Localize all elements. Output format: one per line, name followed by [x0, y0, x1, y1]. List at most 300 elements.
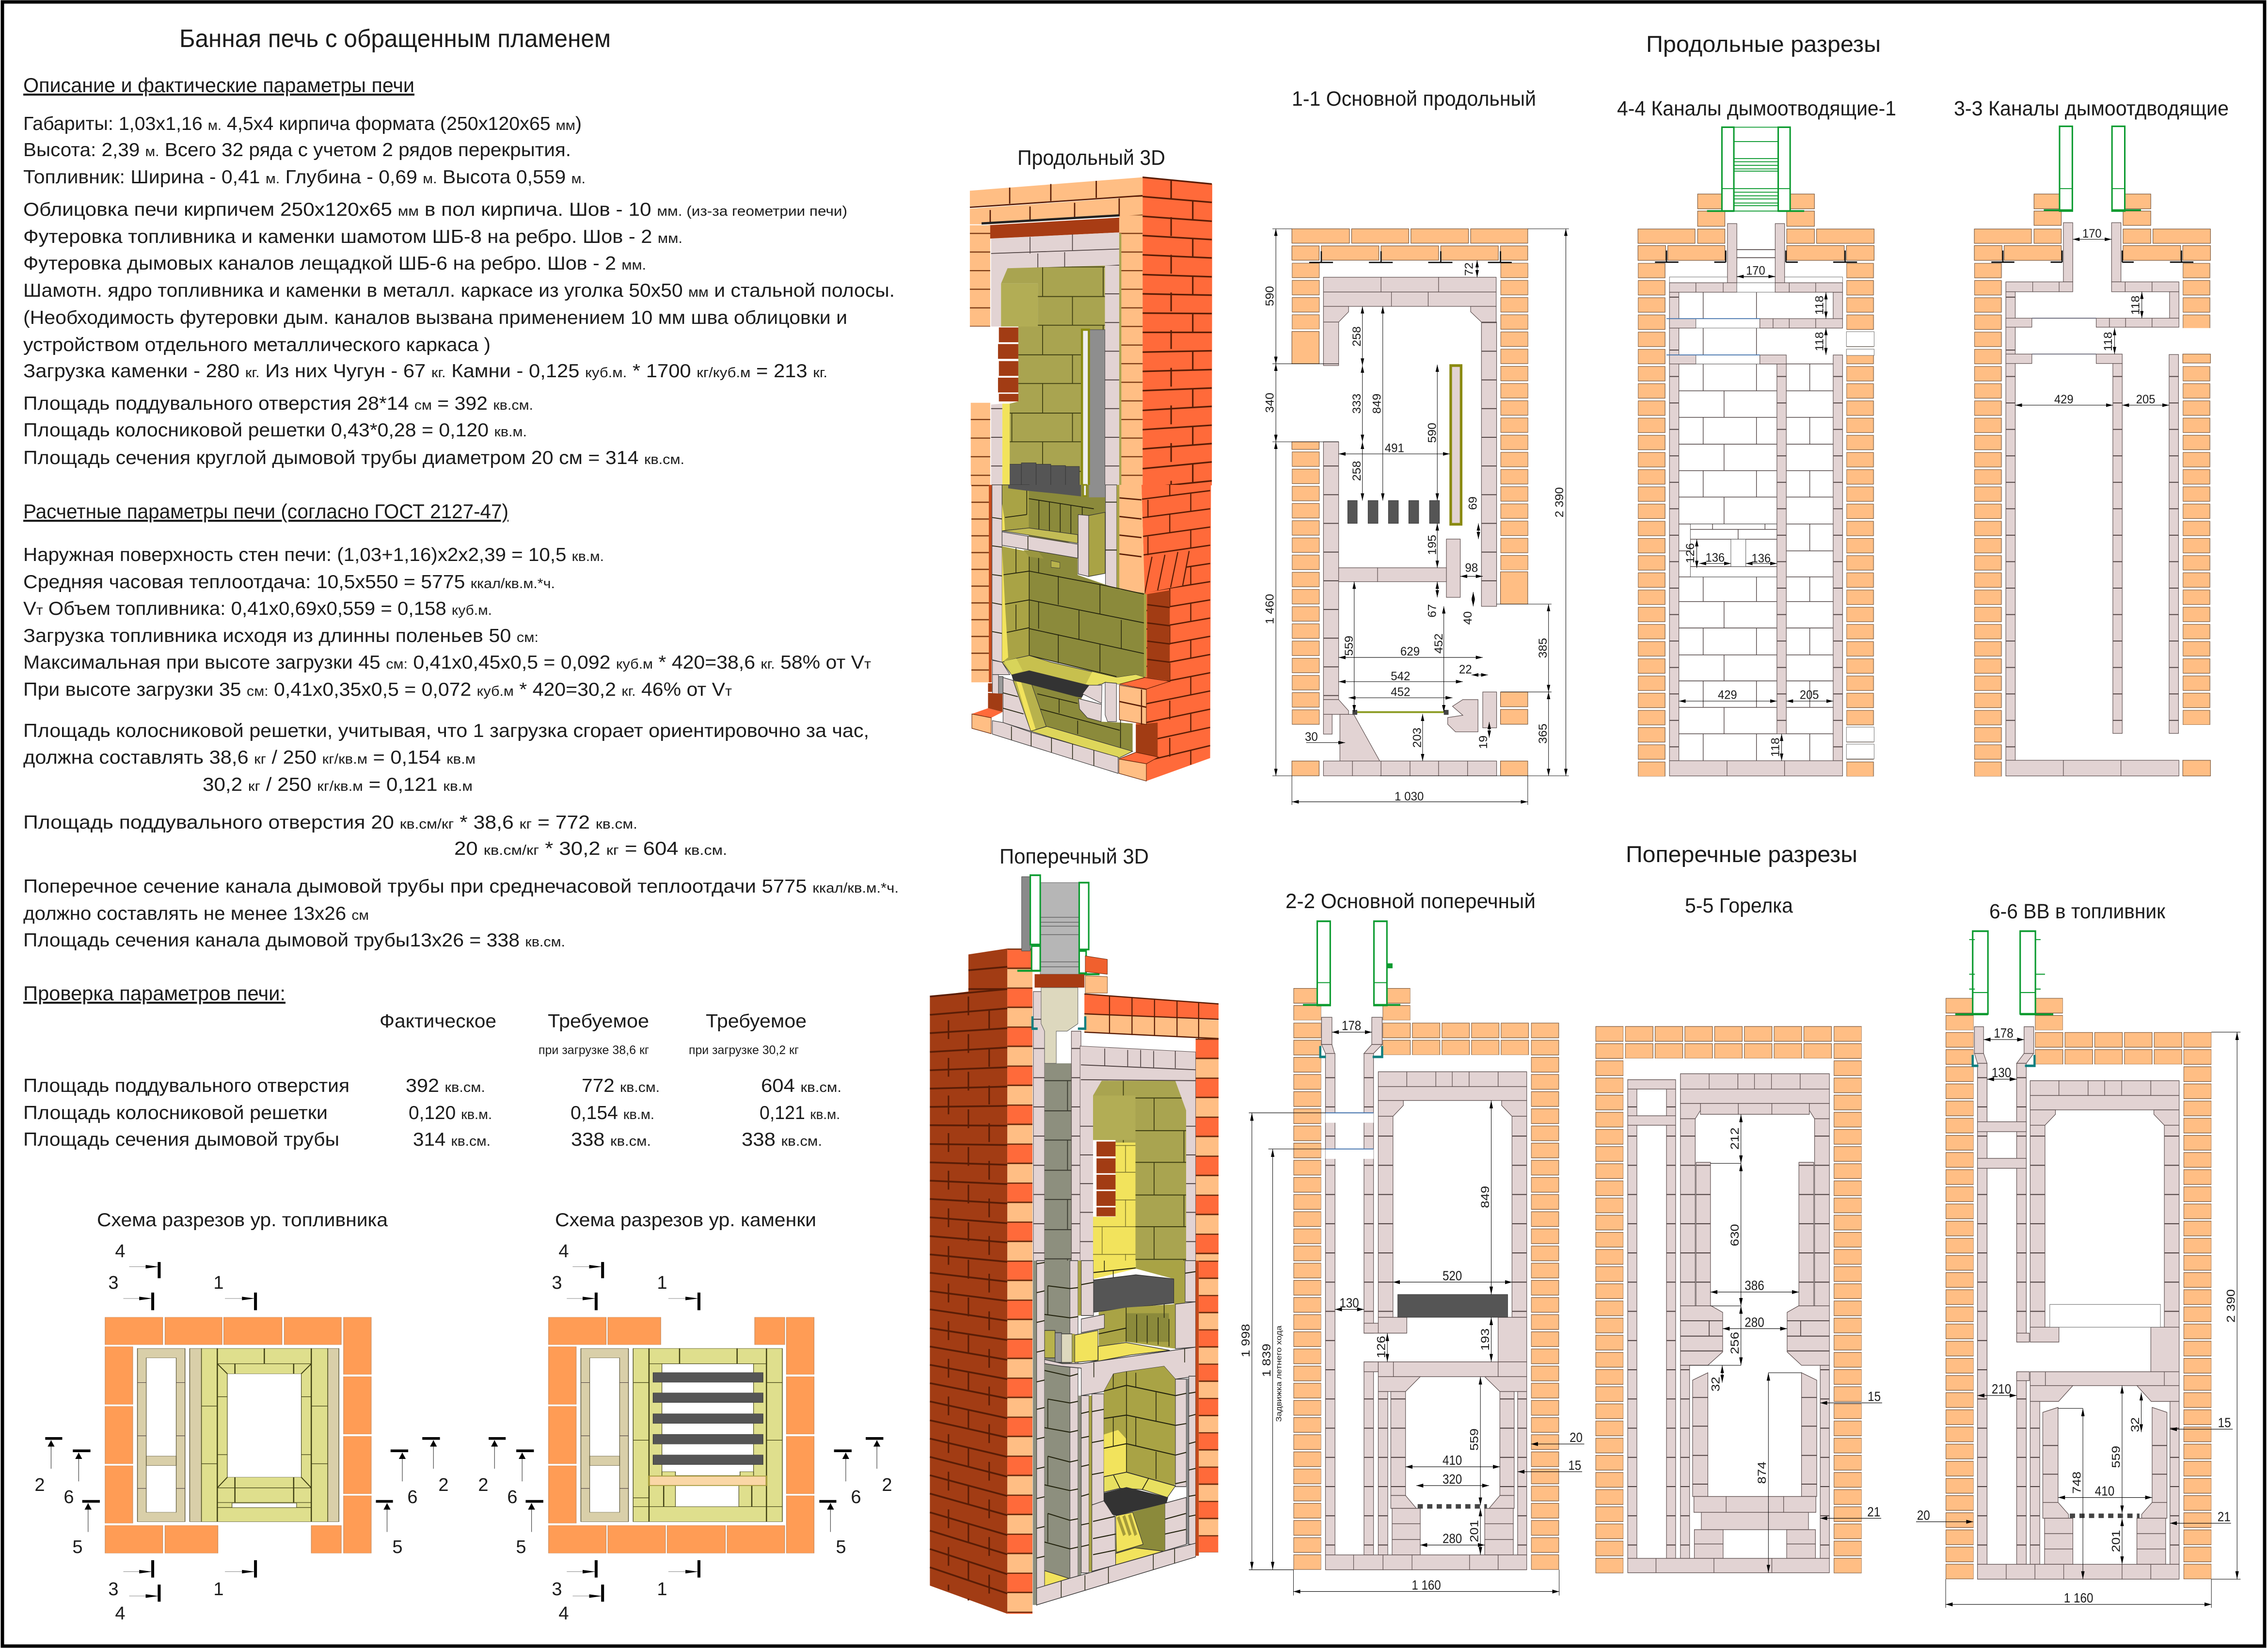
plan section labels: [34, 1241, 892, 1624]
dimensions: 559: [2109, 1446, 2123, 1468]
dimensions: 320: [1443, 1472, 1462, 1487]
steel angles: [1655, 251, 1857, 262]
firebox volume: Vт Объем топливника: 0,41x0,69x0,559 = 0,158 куб.м.: [23, 598, 492, 619]
lower chamber firebrick: [1326, 1362, 1527, 1570]
3D hearth: [1104, 1473, 1175, 1497]
firebrick structure: [1323, 277, 1497, 776]
dimensions: 170: [1746, 264, 1765, 278]
dimensions: 849: [1371, 394, 1383, 414]
3D right olive strip: [1117, 485, 1119, 589]
dimensions: 22: [1459, 663, 1472, 676]
dimensions: [1679, 264, 1833, 761]
outer facing bricks: [1292, 229, 1528, 776]
3D floor yellow: [1031, 726, 1133, 758]
dimensions: 15: [2218, 1415, 2231, 1430]
cast iron blocks: [1348, 500, 1440, 523]
dimensions: 118: [1813, 332, 1826, 351]
heading: transverse 3D: Поперечный 3D: [999, 845, 1149, 868]
lower chamber firebrick: [1978, 1372, 2179, 1579]
dimensions: 491: [1385, 442, 1404, 455]
dimensions line: Габариты: 1,03x1,16 м. 4,5x4 кирпича формата (250x120x65 мм): [23, 113, 582, 134]
grate area: Площадь колосниковой решетки 0,43*0,28 = 0,120 кв.м.: [23, 420, 527, 441]
upper chamber firebrick: [2017, 1081, 2179, 1372]
green chimney collar: [2044, 127, 2141, 211]
3D interior yellow: [1104, 1430, 1126, 1477]
section 3-3 drawing: [1974, 127, 2210, 776]
3D upper floor: [1002, 528, 1078, 544]
3D lower yellow strip: [1002, 548, 1008, 662]
dimensions: 130: [1992, 1065, 2011, 1080]
plan outer bricks: [549, 1317, 814, 1553]
flue calc 3: Площадь сечения канала дымовой трубы13x26 = 338 кв.см.: [23, 930, 565, 951]
3D cast iron: [1008, 485, 1081, 496]
dimensions: 32: [1709, 1377, 1722, 1392]
3D pink pier: [1175, 1302, 1196, 1349]
row 2 label: Площадь колосниковой решетки: [23, 1103, 328, 1123]
back wall bricks: [1669, 277, 1842, 761]
grate: [1352, 710, 1448, 715]
dimensions: 258: [1351, 326, 1364, 347]
plan firebox lining: [190, 1348, 339, 1521]
drawing: longitudinal 3D cutaway, lower part: [971, 485, 1211, 781]
plan section labels: 6: [507, 1487, 518, 1507]
firebox line: Топливник: Ширина - 0,41 м. Глубина - 0,69 м. Высота 0,559 м.: [23, 167, 586, 188]
plan stove chamber lining: [633, 1348, 782, 1521]
3D flue gray wall: [1045, 1063, 1071, 1459]
dimensions: 410: [1443, 1454, 1462, 1468]
title: Банная печь с обращенным пламенем: [179, 25, 611, 53]
dimensions: 195: [1426, 535, 1439, 555]
3D pink slab and arch frame: [1045, 1347, 1196, 1395]
dimensions: 520: [1443, 1269, 1462, 1283]
3D olive riser: [1089, 512, 1105, 576]
3D steel plate: [1082, 330, 1105, 498]
dimensions: 15: [1568, 1458, 1581, 1473]
3D teal angles: [1032, 1016, 1085, 1029]
section 5-5 drawing: [1596, 1026, 1882, 1573]
dimensions: 429: [1718, 688, 1737, 702]
dimensions: 1 160: [1412, 1578, 1441, 1593]
dimensions: 205: [1800, 688, 1819, 702]
dimensions: 30: [1305, 731, 1318, 744]
frame line: Шамотн. ядро топливника и каменки в металл. каркасе из уголка 50x50 мм и стальной полосы.: [23, 280, 895, 301]
steel partition: [1451, 366, 1461, 524]
lining line 1: Футеровка топливника и каменки шамотом ШБ-8 на ребро. Шов - 2 мм.: [23, 226, 682, 247]
dimensions: 1 160: [2064, 1590, 2093, 1605]
row 3 required b: 338 кв.см.: [742, 1129, 822, 1150]
dimensions: [1240, 1019, 1584, 1596]
dimensions: 126: [1375, 1336, 1388, 1358]
column header actual: Фактическое: [380, 1011, 496, 1032]
dimensions: 67: [1426, 604, 1439, 618]
row 2 actual: 0,120 кв.м.: [409, 1103, 492, 1123]
3D yellow left strip: [1002, 404, 1010, 525]
plan section labels: 5: [836, 1537, 846, 1557]
outer facing bricks: [1946, 998, 2211, 1579]
dimensions: 72: [1463, 262, 1475, 276]
row 1 required a: 772 кв.см.: [582, 1075, 660, 1096]
dimensions: 629: [1400, 645, 1420, 658]
3D lower side wall: [1002, 546, 1029, 662]
heading: section 4-4: 4-4 Каналы дымоотводящие-1: [1617, 97, 1896, 120]
dimensions: 20: [1570, 1431, 1583, 1445]
lining line 2: Футеровка дымовых каналов лещадкой ШБ-6 на ребро. Шов - 2 мм.: [23, 253, 646, 274]
chimney area: Площадь сечения круглой дымовой трубы диаметром 20 см = 314 кв.см.: [23, 448, 684, 468]
3D firebox interior: [1093, 1081, 1186, 1318]
heading: stove level plan: Схема разрезов ур. каменки: [555, 1210, 816, 1231]
text block: description and actual parameters: [23, 74, 895, 468]
3D ash pit yellow: [1116, 1512, 1163, 1565]
grate: [2070, 1514, 2140, 1518]
steel angles: [1991, 251, 2193, 262]
3D firebox left pink: [1081, 1261, 1094, 1315]
3D lower left wall: [1092, 1394, 1104, 1506]
plan section labels: 5: [72, 1537, 83, 1557]
3D ash chute: [1013, 680, 1046, 731]
firebrick walls: [1666, 224, 1842, 776]
heading: section 6-6: 6-6 ВВ в топливник: [1989, 900, 2166, 923]
3D right end column: [1199, 1261, 1218, 1553]
plan section labels: 1: [213, 1273, 224, 1293]
dimensions: 452: [1432, 633, 1445, 654]
note line 2: устройством отдельного металлического каркаса ): [23, 335, 491, 355]
3D cast iron box: [1094, 1275, 1174, 1312]
dimensions: 590: [1264, 286, 1277, 306]
3D olive interior upper: [1001, 266, 1105, 485]
dimensions: 32: [2128, 1417, 2142, 1432]
3D red side face: [1142, 176, 1212, 485]
dimensions: 69: [1467, 496, 1479, 510]
section 6-6 drawing: [1916, 931, 2240, 1608]
plan section labels: 3: [108, 1579, 119, 1600]
steel T profiles: [1309, 251, 1512, 262]
stove load line: Загрузка каменки - 280 кг. Из них Чугун - 67 кг. Камни - 0,125 куб.м. * 1700 кг/куб.м = 213 кг.: [23, 361, 827, 382]
max load: Максимальная при высоте загрузки 45 см: 0,41x0,45x0,5 = 0,092 куб.м * 420=38,6 кг. 58% от V т: [23, 652, 871, 673]
plan section labels: 2: [438, 1475, 449, 1495]
plan section labels: 4: [558, 1241, 569, 1262]
3D pink steps: [1078, 685, 1102, 721]
3D flue side block: [1045, 1330, 1075, 1362]
dimensions: 2 390: [2224, 1289, 2237, 1323]
3D red side face: [1136, 485, 1211, 781]
ash calc 2: 20 кв.см/кг * 30,2 кг = 604 кв.см.: [454, 838, 727, 859]
dimensions: 40: [1461, 611, 1475, 624]
plan section labels: 6: [63, 1487, 74, 1507]
note line 1: (Необходимость футеровки дым. каналов вызвана применением 10 мм шва облицовки и: [23, 307, 847, 328]
3D left pink wall: [992, 485, 1002, 662]
dimensions: 21: [1867, 1504, 1880, 1520]
dimensions: 429: [2054, 393, 2074, 406]
plan section marks: [489, 1262, 883, 1601]
3D pink lower right: [1165, 1497, 1186, 1551]
plan section labels: 6: [851, 1487, 861, 1507]
outer surface: Наружная поверхность стен печи: (1,03+1,16)x2x2,39 = 10,5 кв.м.: [23, 544, 604, 565]
dimensions: 333: [1351, 394, 1364, 414]
3D right step bricks: [1085, 956, 1107, 993]
3D right pink wall upper: [1185, 1261, 1196, 1302]
grate calc 1: Площадь колосниковой решетки, учитывая, что 1 загрузка сгорает ориентировочно за час,: [23, 720, 869, 741]
3D upper yellow wall: [1094, 1261, 1136, 1279]
dimensions: 118: [2129, 296, 2142, 315]
dimensions: 118: [1769, 737, 1782, 757]
3D floor yellow at flue: [1045, 1570, 1070, 1586]
dimensions: 590: [1426, 423, 1439, 443]
heat output: Средняя часовая теплоотдача: 10,5x550 = 5775 ккал/кв.м.*ч.: [23, 572, 555, 592]
3D opening bricks: [998, 327, 1020, 401]
dimensions: 340: [1264, 393, 1277, 413]
3D right olive strip lower: [1144, 594, 1146, 676]
dimensions: 205: [2136, 393, 2155, 406]
3D floor pink row: [1037, 1543, 1196, 1605]
dimensions: 258: [1351, 461, 1364, 481]
3D ash pit rear: [1031, 684, 1133, 752]
plan section labels: 4: [115, 1241, 126, 1262]
flue calc 1: Поперечное сечение канала дымовой трубы при среднечасовой теплоотдачи 5775 ккал/кв.м.*ч.: [23, 876, 899, 897]
3D pink lower left: [1092, 1501, 1116, 1571]
dimensions: [2015, 227, 2169, 406]
plan cast iron bars: [653, 1373, 763, 1465]
3D firebox light bricks: [1119, 685, 1146, 724]
3D yellow block: [1075, 1330, 1098, 1362]
3D middle floor: [1082, 1343, 1170, 1364]
3D cast iron blocks: [1008, 463, 1079, 496]
dimensions: 178: [1994, 1025, 2014, 1041]
dimensions: 542: [1391, 670, 1410, 683]
plan section labels: 3: [552, 1273, 562, 1293]
section 4-4 drawing: [1638, 127, 1874, 776]
3D arch bricks: [1142, 550, 1189, 593]
dimensions: 170: [2082, 227, 2102, 240]
plan section labels: 1: [657, 1579, 667, 1600]
3D right walls: [1175, 1376, 1196, 1544]
grate: [1418, 1504, 1487, 1508]
3D pink hearth corner: [992, 660, 1010, 695]
3D upper yellow: [1002, 504, 1005, 531]
3D flue pink right: [1071, 1031, 1081, 1427]
outer facing bricks: [1974, 194, 2210, 776]
table: parameter check: [23, 982, 841, 1150]
grate calc 3: 30,2 кг / 250 кг/кв.м = 0,121 кв.м: [203, 774, 473, 795]
dimensions: 280: [1745, 1314, 1764, 1330]
cladding line: Облицовка печи кирпичем 250x120x65 мм в пол кирпича. Шов - 10 мм. (из-за геометрии печи): [23, 199, 847, 220]
3D lower rear wall: [1029, 548, 1145, 677]
column header required 1: Требуемое: [548, 1011, 649, 1032]
dimensions: 280: [1443, 1532, 1462, 1546]
3D firebrick frame: [991, 232, 1119, 485]
dimensions: 410: [2095, 1483, 2114, 1499]
dimensions: Задвижка летнего хода: [1274, 1326, 1283, 1422]
plan flue channel: [138, 1348, 185, 1521]
3D opening bricks: [1096, 1141, 1115, 1217]
row 3 required a: 338 кв.см.: [571, 1129, 651, 1150]
3D chute yellow: [1016, 681, 1036, 731]
3D left facing bricks: [971, 485, 989, 682]
3D interior block: [1093, 1095, 1136, 1140]
3D chimney pipe: [1017, 875, 1099, 974]
plan section labels: 5: [392, 1537, 403, 1557]
dimensions: 98: [1465, 561, 1478, 575]
3D right end column: [1196, 1039, 1219, 1435]
heading: section 5-5: 5-5 Горелка: [1685, 894, 1793, 917]
3D dark red edge: [1196, 1261, 1199, 1556]
dimensions: 256: [1728, 1332, 1742, 1354]
dimensions: 118: [1813, 296, 1826, 315]
column header required 2: Требуемое: [706, 1011, 807, 1032]
dimensions: 136: [1706, 551, 1725, 565]
3D pink riser: [1078, 514, 1089, 576]
dimensions: 874: [1755, 1461, 1769, 1484]
dimensions: [1690, 1114, 1882, 1573]
row 3 actual: 314 кв.см.: [413, 1129, 491, 1150]
3D upper rear bricks: [1005, 485, 1105, 543]
3D steel plate and gray block: [1083, 485, 1105, 497]
3D interior: [1104, 1366, 1175, 1496]
lower firebrick: [1628, 1365, 1829, 1573]
plan flue channel: [581, 1348, 629, 1521]
dimensions: 386: [1745, 1278, 1764, 1293]
plan section labels: 2: [478, 1475, 489, 1495]
flue walls: [1973, 1027, 2034, 1564]
3D arch pieces: [1024, 550, 1060, 568]
dimensions: [1264, 229, 1569, 805]
dimensions: 212: [1728, 1127, 1742, 1150]
3D olive strip: [1078, 1261, 1081, 1315]
dimensions: 1 460: [1264, 594, 1277, 624]
3D right pink wall: [1106, 485, 1117, 591]
3D right top rows: [1084, 994, 1219, 1039]
plan section labels: 2: [34, 1475, 45, 1495]
dimensions: 2 390: [1553, 487, 1566, 517]
ash opening area: Площадь поддувального отверстия 28*14 см = 392 кв.см.: [23, 393, 533, 414]
3D upper left bricks: [970, 225, 990, 327]
3D grate: [1104, 1487, 1168, 1516]
3D hearth: [1002, 656, 1145, 686]
row 2 required a: 0,154 кв.м.: [571, 1103, 654, 1123]
plan: firebox level: [45, 1262, 440, 1601]
3D floor pink row: [992, 720, 1118, 773]
plan section labels: 4: [115, 1603, 126, 1624]
plan section labels: 1: [657, 1273, 667, 1293]
dimensions: 452: [1391, 686, 1410, 699]
3D flue pink right: [1070, 1261, 1078, 1579]
3D interior block: [1001, 284, 1038, 327]
drawing: transverse 3D cutaway, upper part: [930, 875, 1219, 1614]
dimensions: 849: [1479, 1186, 1492, 1208]
3D pink slab: [1002, 532, 1078, 558]
3D light end bricks: [1119, 196, 1143, 485]
3D frame joints: [1080, 1048, 1196, 1242]
3D chimney base: [1034, 974, 1084, 988]
dimensions: 385: [1537, 638, 1550, 658]
flue walls: [1320, 1017, 1382, 1555]
row 3 label: Площадь сечения дымовой трубы: [23, 1129, 339, 1150]
dimensions: 15: [1868, 1389, 1881, 1404]
dimensions: 630: [1728, 1224, 1742, 1246]
green chimney collar: [1955, 931, 2053, 1014]
3D left red edge: [989, 485, 992, 682]
3D left pink wall: [991, 404, 1002, 525]
plan section labels: 3: [552, 1579, 562, 1600]
upper chamber firebrick: [1364, 1072, 1527, 1362]
heading: section 3-3: 3-3 Каналы дымоотдводящие: [1954, 97, 2229, 120]
heading: firebox level plan: Схема разрезов ур. топливника: [97, 1210, 388, 1231]
sub header 2: при загрузке 30,2 кг: [689, 1043, 799, 1057]
dimensions: [1916, 1025, 2240, 1608]
3D front strip bricks: [1007, 948, 1032, 1614]
3D dark recessed bricks: [1147, 590, 1170, 681]
heading: longitudinal sections: Продольные разрезы: [1646, 31, 1881, 57]
3D lower left columns: [1078, 1395, 1092, 1578]
dimensions: 136: [1752, 552, 1771, 565]
3D bottom right brick: [1119, 752, 1158, 781]
flue calc 2: должно составлять не менее 13x26 см: [23, 903, 369, 924]
dimensions: 201: [2109, 1530, 2123, 1552]
dimensions: 19: [1477, 736, 1490, 749]
3D left pink strip: [1033, 992, 1045, 1437]
plan section labels: 2: [882, 1475, 892, 1495]
3D flue cream section: [1041, 988, 1078, 1063]
row 1 label: Площадь поддувального отверстия: [23, 1075, 349, 1096]
plan section labels: 1: [213, 1579, 224, 1600]
3D flue gray wall: [1045, 1261, 1070, 1579]
ash calc 1: Площадь поддувального отверстия 20 кв.см/кг * 38,6 кг = 772 кв.см.: [23, 812, 637, 833]
dimensions: 20: [1917, 1507, 1930, 1523]
row 2 required b: 0,121 кв.м.: [760, 1103, 840, 1123]
row 1 required b: 604 кв.см.: [761, 1075, 841, 1096]
dimensions: 178: [1342, 1019, 1361, 1033]
3D firebox mouth top: [1119, 677, 1170, 689]
3D left pink strip: [1037, 1261, 1045, 1605]
3D dark lower bricks: [1136, 722, 1158, 757]
section 2-2 drawing: [1240, 921, 1584, 1596]
3D upper side wall: [1002, 485, 1029, 531]
3D thick yellow band: [1119, 233, 1121, 525]
outer facing bricks: [1596, 1026, 1862, 1573]
drawing: transverse 3D cutaway, lower part: [1033, 1261, 1218, 1605]
dimensions: 559: [1343, 636, 1356, 656]
heading: calculated: Расчетные параметры печи (согласно ГОСТ 2127-47): [23, 500, 508, 523]
green chimney collar: [1707, 127, 1804, 211]
3D left red face: [930, 948, 1007, 1614]
plan section labels: 4: [558, 1603, 569, 1624]
dimensions: 559: [1468, 1428, 1481, 1451]
firewood load: Загрузка топливника исходя из длинны поленьев 50 см:: [23, 625, 539, 646]
3D pink ledge: [1081, 1314, 1104, 1333]
flue channel: [1628, 1080, 1676, 1558]
3D middle chamber: [1099, 1304, 1175, 1349]
3D firebrick frame upper: [1080, 1046, 1196, 1417]
plan section labels: 6: [407, 1487, 418, 1507]
3D grate: [1012, 671, 1089, 698]
plan section marks: [45, 1262, 440, 1601]
heading: description: Описание и фактические параметры печи: [23, 74, 414, 96]
dimensions: 130: [1340, 1296, 1359, 1311]
outer facing bricks: [1638, 194, 1874, 776]
3D pink post: [1105, 682, 1116, 721]
dimensions: 748: [2070, 1472, 2083, 1494]
cast iron slab: [1398, 1295, 1507, 1317]
plan outer bricks: [105, 1317, 371, 1553]
green chimney collar: [1303, 921, 1400, 1006]
3D yellow wall: [1093, 1142, 1136, 1281]
3D light end bricks: [1119, 485, 1145, 593]
dimensions: 126: [1684, 543, 1697, 563]
load at 35: При высоте загрузки 35 см: 0,41x0,35x0,5 = 0,072 куб.м * 420=30,2 кг. 46% от V т: [23, 679, 732, 700]
dimensions: 21: [2218, 1509, 2231, 1524]
3D lower left bricks: [970, 402, 990, 485]
drawing: longitudinal 3D cutaway, upper part: [969, 176, 1212, 485]
3D chute pink bricks: [1003, 677, 1031, 731]
